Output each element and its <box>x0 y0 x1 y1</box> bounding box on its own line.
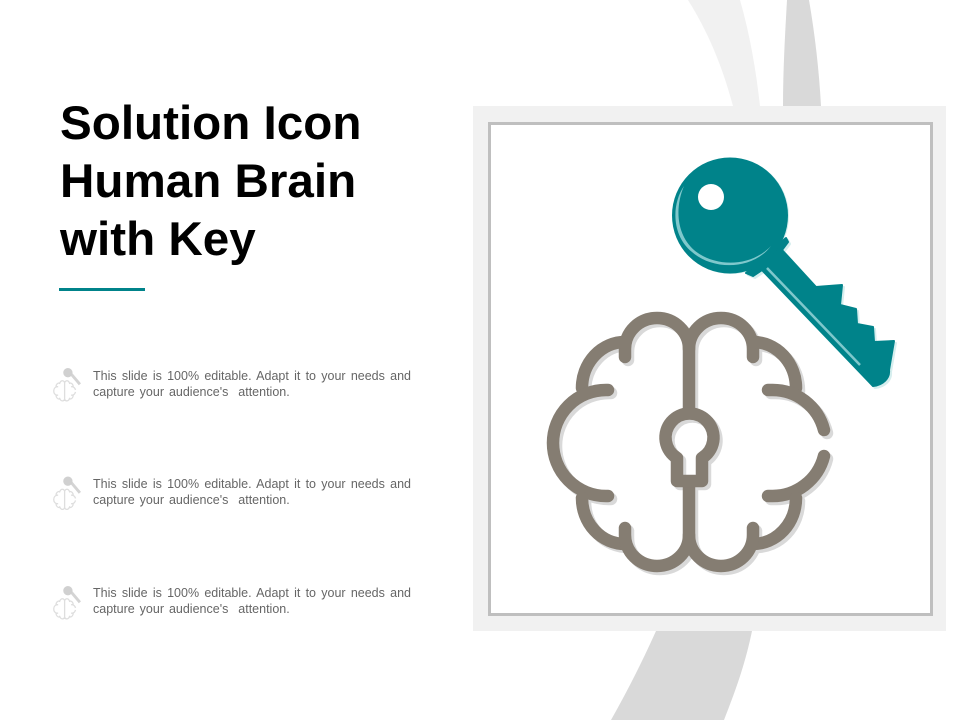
text block 1: This slide is 100% editable. Adapt it to your needs and capture your audience's attention. <box>93 369 411 399</box>
text block 2: This slide is 100% editable. Adapt it to your needs and capture your audience's attention. <box>93 477 411 507</box>
icon: small key and brain 1 <box>54 368 80 401</box>
title <box>60 97 361 266</box>
icon: human brain with keyhole <box>553 318 827 569</box>
title: Solution Icon <box>60 97 361 150</box>
title: Human Brain <box>60 155 356 208</box>
title accent line <box>59 288 145 291</box>
icon: small key and brain 2 <box>54 477 80 509</box>
icon: teal key <box>672 158 896 388</box>
title: with Key <box>60 213 256 266</box>
text block 3: This slide is 100% editable. Adapt it to your needs and capture your audience's attention. <box>93 586 411 616</box>
icon: small key and brain 3 <box>54 586 80 619</box>
